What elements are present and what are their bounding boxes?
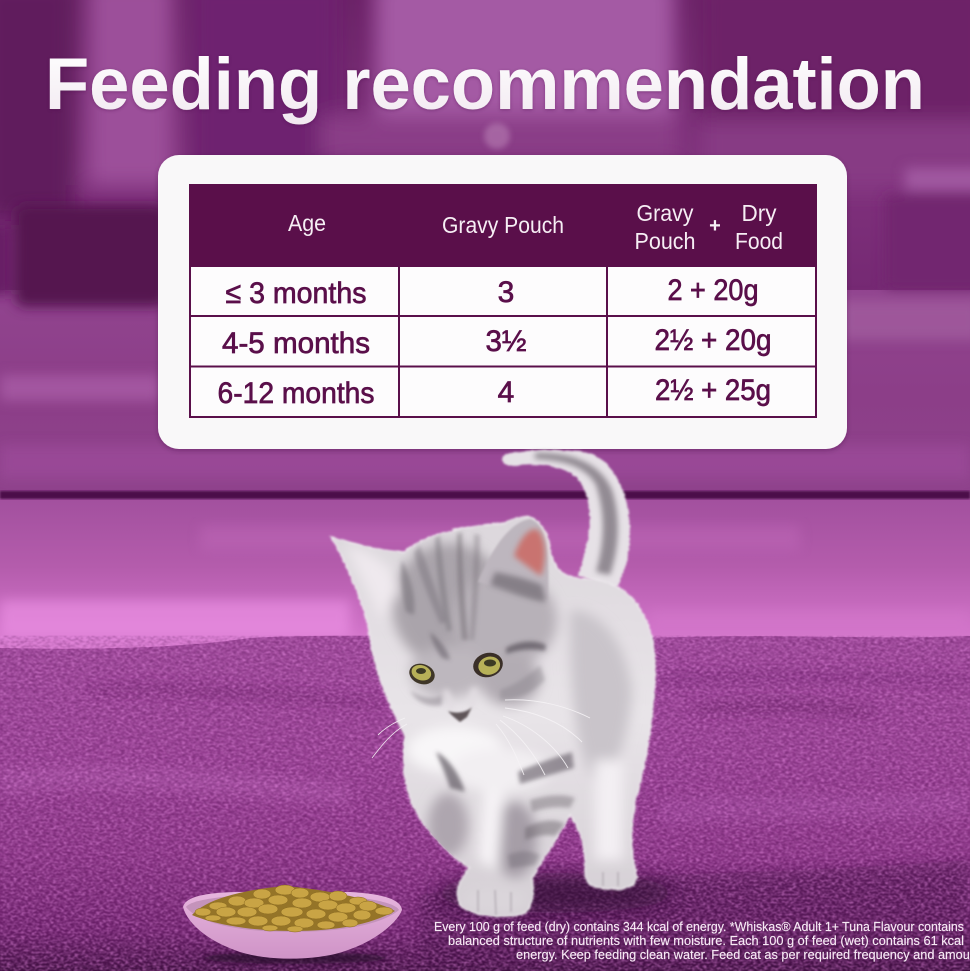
row: 4-5 months bbox=[222, 324, 772, 360]
kitten left eye bbox=[407, 660, 437, 688]
row: 6-12 months bbox=[218, 374, 771, 410]
kitten whiskers bbox=[372, 700, 590, 775]
row: 4-5 months: 4-5 months bbox=[222, 327, 370, 360]
table header: Dry bbox=[742, 200, 777, 226]
kitten silhouette bbox=[331, 517, 655, 916]
kitten tail bbox=[502, 450, 630, 590]
kitten right ear bbox=[478, 519, 548, 602]
row: 6-12 months: 2½ + 25g bbox=[655, 374, 771, 407]
row: 3 months or less bbox=[226, 274, 758, 310]
table header: Age bbox=[288, 210, 326, 236]
kibble bbox=[195, 885, 393, 932]
footnote: balanced structure of nutrients with few moisture. Each 100 g of feed (wet) contains 61 kcal bbox=[448, 933, 964, 948]
row: 4-5 months: 3½ bbox=[486, 325, 526, 358]
carpet bbox=[0, 636, 970, 971]
kitten shadow bbox=[435, 873, 675, 913]
table header: Pouch bbox=[634, 228, 696, 254]
paw toes bbox=[478, 872, 618, 915]
floor bbox=[0, 491, 970, 650]
table header bbox=[189, 184, 817, 266]
row: 3 months or less: ≤ 3 months bbox=[226, 277, 366, 310]
kitten right eye bbox=[470, 650, 506, 680]
row: 3 months or less: 3 bbox=[498, 276, 514, 309]
table body grid bbox=[190, 266, 816, 417]
row: 4-5 months: 2½ + 20g bbox=[654, 324, 772, 357]
row: 6-12 months: 6-12 months bbox=[218, 377, 374, 410]
title: Feeding recommendation bbox=[45, 44, 925, 125]
kitten fur shading bbox=[345, 532, 632, 915]
table header: Gravy bbox=[636, 200, 694, 226]
table header: Food bbox=[735, 228, 783, 254]
row: 6-12 months: 4 bbox=[498, 376, 514, 409]
kitten nose bbox=[445, 688, 475, 722]
row: 3 months or less: 2 + 20g bbox=[668, 274, 758, 307]
food bowl bbox=[183, 885, 402, 964]
panel: feeding table card bbox=[158, 155, 847, 449]
kitten illustration bbox=[331, 450, 655, 916]
footnote bbox=[434, 919, 970, 962]
blurred room background bbox=[0, 0, 970, 500]
table header: + bbox=[709, 215, 721, 237]
table header: Gravy Pouch bbox=[442, 212, 564, 238]
